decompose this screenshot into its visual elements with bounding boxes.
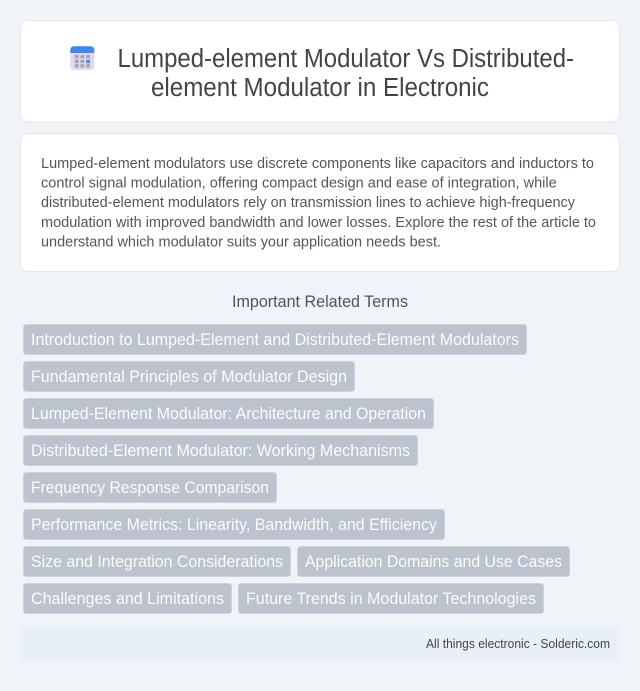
panel: summary card	[20, 134, 620, 272]
tag: application domains: Application Domains and Use Cases	[305, 552, 562, 571]
tag list: related terms	[24, 324, 570, 614]
text block: summary paragraph: Lumped-element modulators use discrete components like capacitors and inductors to	[41, 156, 594, 172]
text block: summary paragraph: distributed-element modulators rely on transmission lines to achieve high-frequency	[41, 195, 576, 211]
tag: performance metrics: Performance Metrics: Linearity, Bandwidth, and Efficiency	[31, 515, 438, 534]
tag: fundamental principles: Fundamental Principles of Modulator Design	[31, 367, 347, 386]
tag: distributed-element modulator: Distributed-Element Modulator: Working Mechanisms	[31, 441, 410, 460]
tag: introduction: Introduction to Lumped-Element and Distributed-Element Modulators	[31, 330, 519, 349]
title: element Modulator in Electronic	[151, 74, 489, 102]
tag: distributed-element modulator	[24, 436, 418, 466]
tag: size and integration: Size and Integration Considerations	[31, 552, 283, 571]
panel: title card	[20, 20, 620, 122]
tag: future trends	[238, 584, 544, 614]
tag: frequency response: Frequency Response Comparison	[31, 478, 269, 497]
heading: important related terms: Important Related Terms	[232, 292, 408, 311]
tag: application domains	[298, 546, 570, 576]
text block: summary paragraph	[41, 156, 596, 250]
title	[118, 45, 574, 102]
tag: introduction	[24, 324, 526, 354]
text block: summary paragraph: understand which modulator suits your application needs best.	[41, 234, 441, 250]
title: Lumped-element Modulator Vs Distributed-	[118, 45, 574, 73]
icon: calendar	[70, 46, 94, 70]
text block: summary paragraph: control signal modulation, offering compact design and ease of integration, while	[41, 176, 557, 192]
footer bar: All things electronic - Solderic.com	[426, 637, 610, 651]
tag: challenges	[24, 584, 232, 614]
tag: lumped-element modulator	[24, 398, 434, 428]
tag: future trends: Future Trends in Modulator Technologies	[246, 589, 536, 608]
text block: summary paragraph: modulation with improved bandwidth and lower losses. Explore the rest of the article to	[41, 215, 596, 231]
tag: fundamental principles	[24, 362, 354, 392]
footer bar	[20, 627, 620, 661]
tag: size and integration	[24, 546, 290, 576]
tag: challenges: Challenges and Limitations	[31, 589, 224, 608]
tag: frequency response	[24, 472, 276, 502]
tag: lumped-element modulator: Lumped-Element Modulator: Architecture and Operation	[31, 404, 426, 423]
tag: performance metrics	[24, 510, 444, 540]
